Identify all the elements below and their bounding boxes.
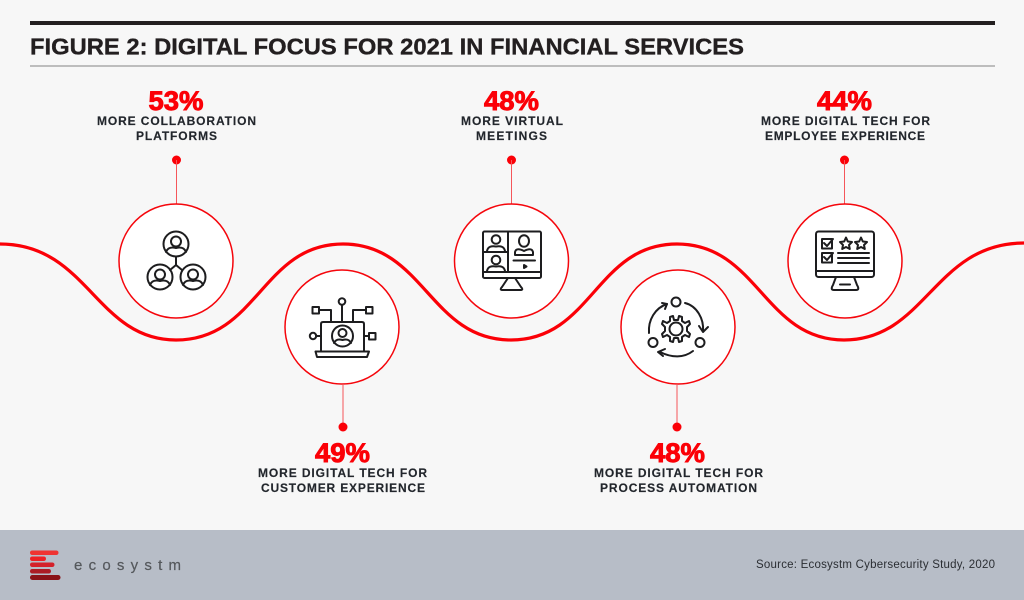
icon: laptop with network <box>310 298 376 357</box>
item 1: collaboration platforms <box>97 86 256 318</box>
circle node <box>285 270 399 384</box>
label: process automation: PROCESS AUTOMATION <box>600 481 757 495</box>
label: collaboration platforms: PLATFORMS <box>136 129 217 143</box>
title: FIGURE 2: DIGITAL FOCUS FOR 2021 IN FINANCIAL SERVICES <box>30 34 744 60</box>
icon: gear with cycle arrows <box>648 298 708 356</box>
logo wordmark: ecosystm <box>74 557 181 574</box>
stat: 53%: 53% <box>148 86 204 116</box>
item 2: customer experience <box>258 270 427 495</box>
label: virtual meetings <box>461 114 563 143</box>
label: employee experience: EMPLOYEE EXPERIENCE <box>765 129 925 143</box>
item 4: process automation <box>594 270 763 495</box>
wave line <box>0 243 1024 340</box>
stat: 49%: 49% <box>315 438 370 468</box>
label: collaboration platforms: MORE COLLABORATION <box>97 114 256 128</box>
top rule <box>30 21 995 25</box>
label: customer experience: MORE DIGITAL TECH FOR <box>258 466 427 480</box>
stat: 48%: 48% <box>484 86 539 116</box>
icon: rating monitor <box>816 232 874 290</box>
icon: video meeting monitor <box>483 232 541 290</box>
circle node <box>119 204 233 318</box>
circle node <box>621 270 735 384</box>
connector pin <box>840 156 849 204</box>
icon: three connected people <box>148 232 206 290</box>
source note: Source: Ecosystm Cybersecurity Study, 2020 <box>756 559 995 571</box>
circle node <box>788 204 902 318</box>
connector pin <box>338 384 348 432</box>
footer band <box>0 530 1024 600</box>
label: customer experience <box>258 466 427 495</box>
label: virtual meetings: MORE VIRTUAL <box>461 114 563 128</box>
item 3: virtual meetings <box>454 86 568 318</box>
stat: 44%: 44% <box>817 86 872 116</box>
label: customer experience: CUSTOMER EXPERIENCE <box>261 481 425 495</box>
logo mark <box>30 550 60 580</box>
stat: 48%: 48% <box>650 438 705 468</box>
connector pin <box>172 156 181 204</box>
label: process automation <box>594 466 763 495</box>
connector pin <box>672 384 682 432</box>
label: employee experience <box>761 114 930 143</box>
label: process automation: MORE DIGITAL TECH FOR <box>594 466 763 480</box>
label: virtual meetings: MEETINGS <box>476 129 547 143</box>
item 5: employee experience <box>761 86 930 318</box>
label: employee experience: MORE DIGITAL TECH FOR <box>761 114 930 128</box>
label: collaboration platforms <box>97 114 256 143</box>
circle node <box>454 204 568 318</box>
connector pin <box>507 156 516 204</box>
